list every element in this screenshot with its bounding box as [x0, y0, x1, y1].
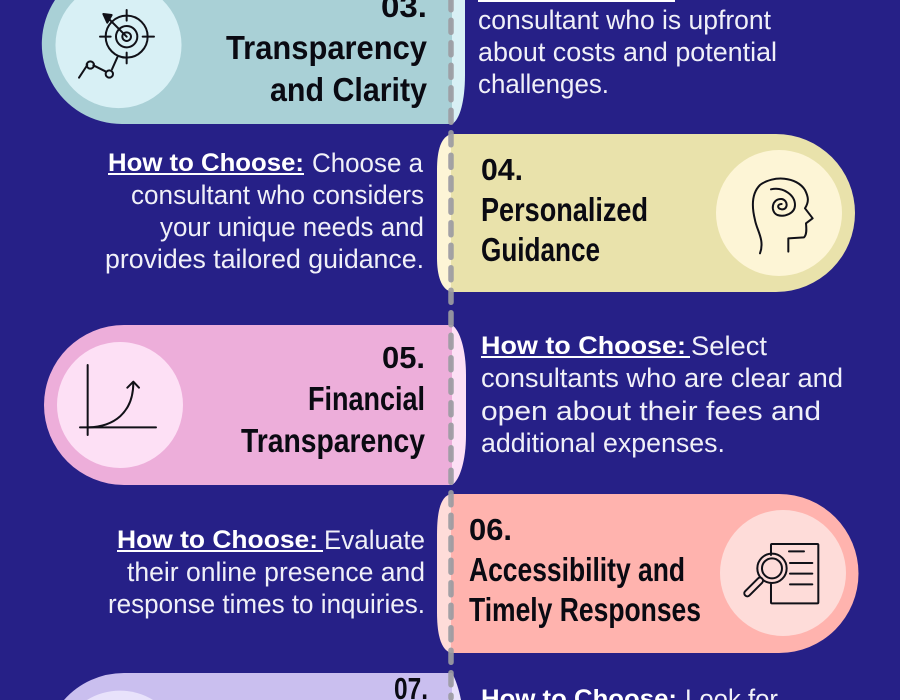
- text block: 05 how to choose: open about their fees and: [481, 396, 821, 426]
- text block: 04 how to choose: [105, 148, 424, 274]
- text block: 05 how to choose: additional expenses.: [481, 428, 725, 458]
- text block: 04 how to choose: consultant who considers: [131, 180, 424, 210]
- text block: 03 how to choose: consultant who is upfront: [478, 5, 771, 35]
- heading: 03: and Clarity: [270, 71, 428, 108]
- heading: 06: Accessibility and: [469, 551, 685, 588]
- text block: 06 how to choose: their online presence and: [127, 557, 425, 587]
- text block: 06 how to choose: [108, 525, 425, 619]
- heading: 04: [481, 152, 648, 268]
- icon circle: target: [56, 0, 182, 108]
- heading: 05: Transparency: [241, 422, 426, 459]
- panel: 05 financial transparency: [44, 325, 466, 485]
- heading: 06: [469, 512, 701, 628]
- icon: target with arrow and trend line: [79, 10, 154, 78]
- icon circle: head: [716, 150, 842, 276]
- panel: 06 accessibility and timely responses: [437, 494, 858, 653]
- text block: 05 how to choose: Select: [691, 331, 767, 361]
- text block: 04 how to choose: your unique needs and: [160, 212, 424, 242]
- heading: 04: Guidance: [481, 231, 600, 268]
- text block: 04 how to choose: How to Choose:: [108, 149, 304, 177]
- heading: 05: Financial: [308, 380, 425, 417]
- icon circle: chart: [57, 342, 183, 468]
- heading: 06: 06.: [469, 512, 512, 547]
- heading: 03: Transparency: [226, 29, 428, 66]
- panel: 04 personalized guidance: [437, 134, 855, 292]
- heading: 05: 05.: [382, 340, 425, 375]
- text block: 06 how to choose: response times to inquiries.: [108, 589, 425, 619]
- heading: 04: 04.: [481, 152, 523, 187]
- text block: 07 how to choose: [481, 684, 778, 700]
- heading: 04: Personalized: [481, 191, 648, 228]
- heading: 05: [241, 340, 426, 459]
- heading: 06: Timely Responses: [469, 591, 701, 628]
- text block: 04 how to choose: provides tailored guidance.: [105, 244, 424, 274]
- icon circle: magnifier: [720, 510, 846, 636]
- heading: 03: [226, 0, 428, 108]
- text block: 03 how to choose: [478, 0, 777, 99]
- text block: 03 how to choose: challenges.: [478, 69, 609, 99]
- icon: magnifier over document: [747, 544, 818, 603]
- icon: head with spiral: [753, 179, 813, 253]
- text block: 05 how to choose: How to Choose:: [481, 332, 686, 360]
- panel: 03 transparency and clarity: [42, 0, 465, 124]
- dashed timeline: [448, 0, 454, 698]
- text block: 05 how to choose: [481, 331, 843, 458]
- text block: 05 how to choose: consultants who are clear and: [481, 363, 843, 393]
- text block: 06 how to choose: Evaluate: [324, 525, 425, 555]
- text block: 03 how to choose: about costs and potential: [478, 37, 777, 67]
- text block: 04 how to choose: Choose a: [312, 148, 424, 178]
- icon circle: 07: [87, 691, 153, 700]
- text block: 06 how to choose: How to Choose:: [117, 526, 318, 554]
- panel: 07: [64, 671, 461, 700]
- icon: growth curve chart: [80, 365, 156, 435]
